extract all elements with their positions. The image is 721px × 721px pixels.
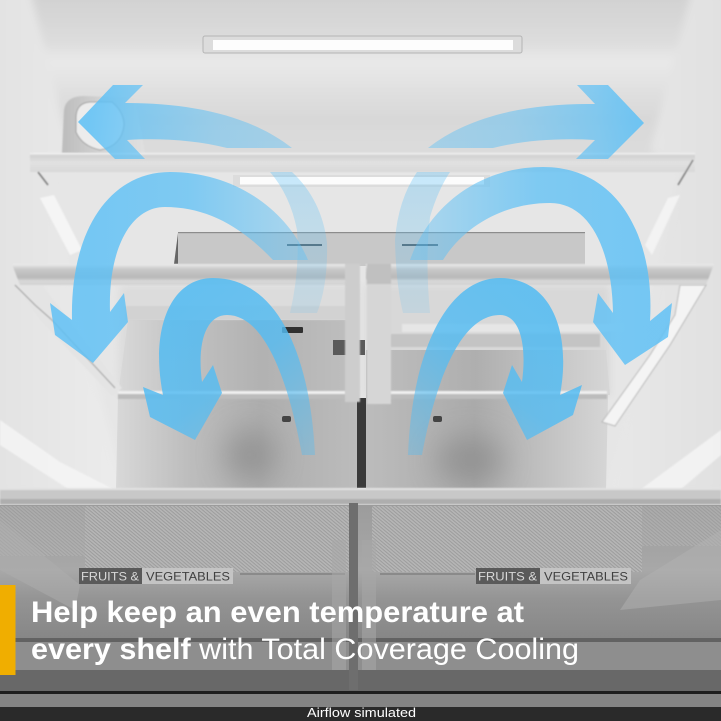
headline: Help keep an even temperature at [31,596,524,629]
top shelf [30,153,695,255]
left upper shelf rail [12,264,360,402]
arrow: small right [408,278,582,455]
headline [31,596,579,666]
arrow: large left [50,172,308,363]
bottom rail [0,691,721,721]
disclaimer: Airflow simulated [307,705,416,720]
rear fan housing [62,96,145,153]
headline: every shelf with Total Coverage Cooling [31,633,579,666]
accent bar [0,585,16,675]
crisper drawer rim [0,488,721,505]
second light [233,175,490,187]
label: fruits and vegetables left [79,568,233,584]
left glass shelf lower [15,285,347,399]
vent slots [282,244,442,422]
arrow: small left [143,278,315,455]
ceiling light [203,36,522,53]
label: fruits and vegetables left: VEGETABLES [146,570,230,584]
label: fruits and vegetables right: VEGETABLES [544,570,628,584]
label: fruits and vegetables right: FRUITS & [478,570,537,584]
right upper shelf rail [366,264,714,404]
center divider [333,340,366,488]
faded rear airflow left [270,172,327,313]
arrow: large right [410,167,672,365]
faded rear airflow right [395,172,450,313]
label: fruits and vegetables left: FRUITS & [81,570,139,584]
right glass shelf lower [385,285,706,426]
label: fruits and vegetables right [476,568,631,584]
arrow: top right [428,85,644,159]
crisper drawers [0,503,721,693]
arrow: top left [78,85,292,159]
